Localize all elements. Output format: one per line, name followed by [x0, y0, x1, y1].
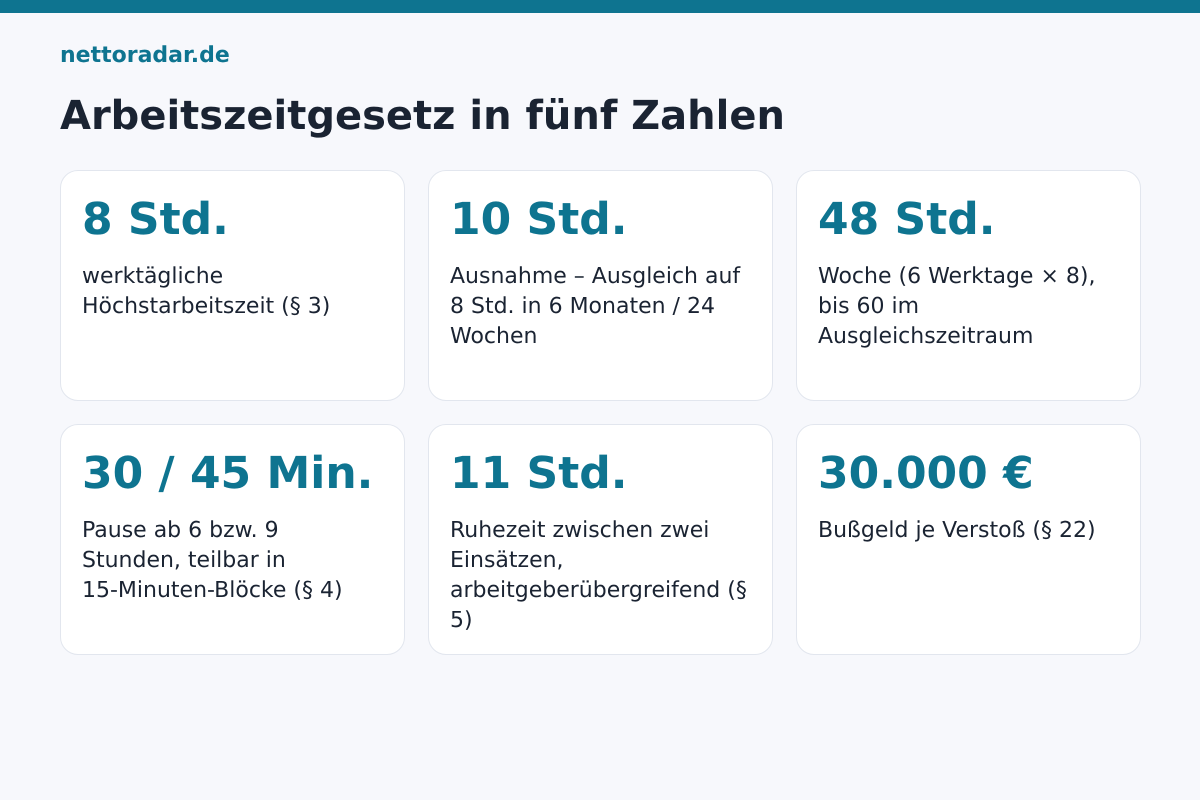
description: breaks: 15-Minuten-Blöcke (§ 4)	[82, 578, 343, 603]
number: 30.000 €: 30.000 €	[818, 448, 1034, 499]
panel: 11 Std.	[428, 424, 773, 655]
description: exception: 8 Std. in 6 Monaten / 24	[450, 294, 715, 319]
panel: 48 Std.	[796, 170, 1141, 401]
description: weekly limit: Ausgleichszeitraum	[818, 324, 1033, 349]
description: rest period: Ruhezeit zwischen zwei	[450, 518, 709, 543]
number: 8 Std.: 8 Std.	[82, 194, 229, 245]
description: daily working time: werktägliche	[82, 264, 223, 289]
number: 30 / 45 Min.: 30 / 45 Min.	[82, 448, 373, 499]
description: weekly limit	[818, 264, 1095, 349]
panel: 10 Std.	[428, 170, 773, 401]
description: daily working time: Höchstarbeitszeit (§ 3)	[82, 294, 330, 319]
panel: 8 Std.	[60, 170, 405, 401]
top accent bar	[0, 0, 1200, 13]
description: rest period: 5)	[450, 608, 473, 632]
description: breaks: Stunden, teilbar in	[82, 548, 286, 573]
title: Arbeitszeitgesetz in fünf Zahlen	[60, 93, 785, 139]
description: fine: Bußgeld je Verstoß (§ 22)	[818, 518, 1096, 543]
description: rest period	[450, 518, 747, 632]
number: 48 Std.: 48 Std.	[818, 194, 995, 245]
description: breaks: Pause ab 6 bzw. 9	[82, 518, 279, 543]
description: exception	[450, 264, 741, 349]
number: 11 Std.: 11 Std.	[450, 448, 627, 499]
panel: 30.000 €	[796, 424, 1141, 655]
description: rest period: Einsätzen,	[450, 548, 564, 573]
number: 10 Std.: 10 Std.	[450, 194, 627, 245]
description: breaks	[82, 518, 343, 603]
description: rest period: arbeitgeberübergreifend (§	[450, 578, 747, 603]
description: exception: Wochen	[450, 324, 537, 349]
description: daily working time	[82, 264, 330, 319]
description: exception: Ausnahme – Ausgleich auf	[450, 264, 740, 289]
brand name: nettoradar.de	[60, 43, 230, 68]
description: weekly limit: Woche (6 Werktage × 8),	[818, 264, 1095, 289]
description: weekly limit: bis 60 im	[818, 294, 919, 319]
panel: 30 / 45 Min.	[60, 424, 405, 655]
